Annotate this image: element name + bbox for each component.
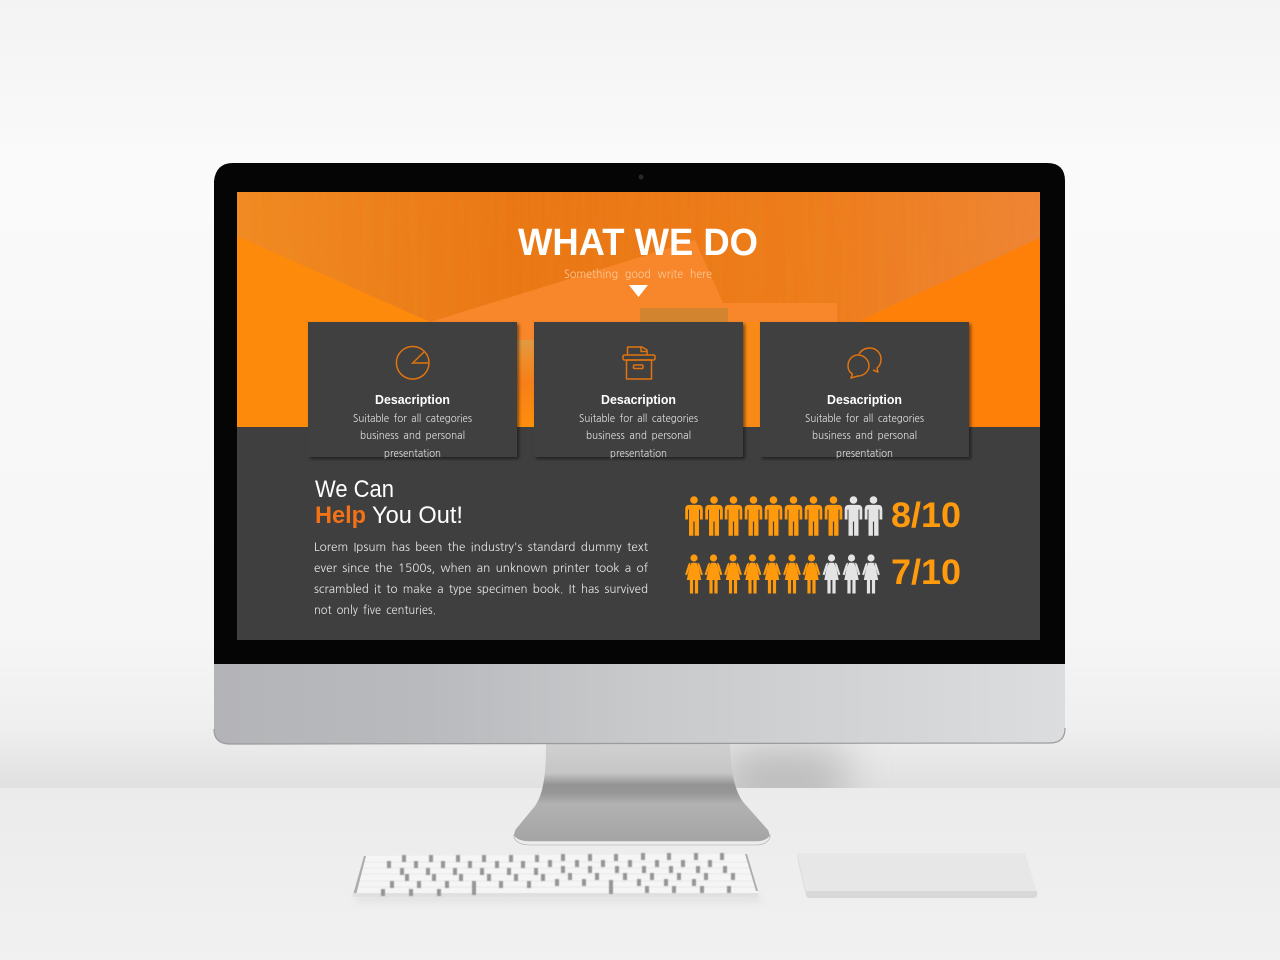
keyboard <box>353 853 760 902</box>
monitor <box>214 163 1065 744</box>
title: WHAT WE DO <box>518 222 758 264</box>
text block: lorem ipsum: Lorem Ipsum has been the industry's standard dummy text <box>314 541 649 553</box>
card text: presentation <box>836 448 893 459</box>
card text <box>579 413 698 459</box>
subtitle: Something good write here <box>564 268 712 280</box>
card text: Suitable for all categories <box>579 413 698 424</box>
panel: card 3 <box>760 322 969 459</box>
down arrow <box>629 285 648 297</box>
card text: presentation <box>384 448 441 459</box>
slide screen <box>237 192 1040 640</box>
monitor bezel <box>214 163 1065 664</box>
desk surface <box>0 788 1280 960</box>
card text <box>805 413 924 459</box>
icon: pie chart <box>396 346 429 379</box>
text block: lorem ipsum: not only five centuries. <box>314 604 436 616</box>
panel: card 1 <box>308 322 517 459</box>
text block: lorem ipsum <box>314 541 649 616</box>
stand shadow <box>730 744 862 788</box>
card text: business and personal <box>812 430 917 441</box>
icon: archive box <box>623 347 655 379</box>
stat: 8/10: 8/10 <box>891 496 961 535</box>
text block: lorem ipsum: ever since the 1500s, when an unknown printer took a of <box>314 562 648 574</box>
pictogram: women 7 of 10 <box>685 554 880 594</box>
panel: card 2 <box>534 322 743 459</box>
heading: we can help you out: Help <box>315 502 366 529</box>
dark lower background <box>237 427 1040 640</box>
heading: we can help you out: We Can <box>315 476 394 503</box>
icon: speech bubbles <box>848 348 881 378</box>
text block: lorem ipsum: scrambled it to make a type specimen book. It has survived <box>314 583 648 595</box>
heading: we can help you out <box>315 476 463 529</box>
stat: 7/10: 7/10 <box>891 553 961 592</box>
card text: Suitable for all categories <box>353 413 472 424</box>
monitor chin <box>214 660 1065 744</box>
card text <box>353 413 472 459</box>
pictogram: men 8 of 10 <box>685 496 882 536</box>
card text: presentation <box>610 448 667 459</box>
card text: business and personal <box>360 430 465 441</box>
card heading: Desacription <box>375 392 450 407</box>
orange wood header background <box>237 192 1040 427</box>
card heading: Desacription <box>827 392 902 407</box>
card heading: Desacription <box>601 392 676 407</box>
webcam <box>638 174 644 180</box>
card text: Suitable for all categories <box>805 413 924 424</box>
card text: business and personal <box>586 430 691 441</box>
trackpad <box>797 853 1037 898</box>
monitor stand <box>514 744 770 845</box>
heading: we can help you out: You Out! <box>372 502 463 529</box>
